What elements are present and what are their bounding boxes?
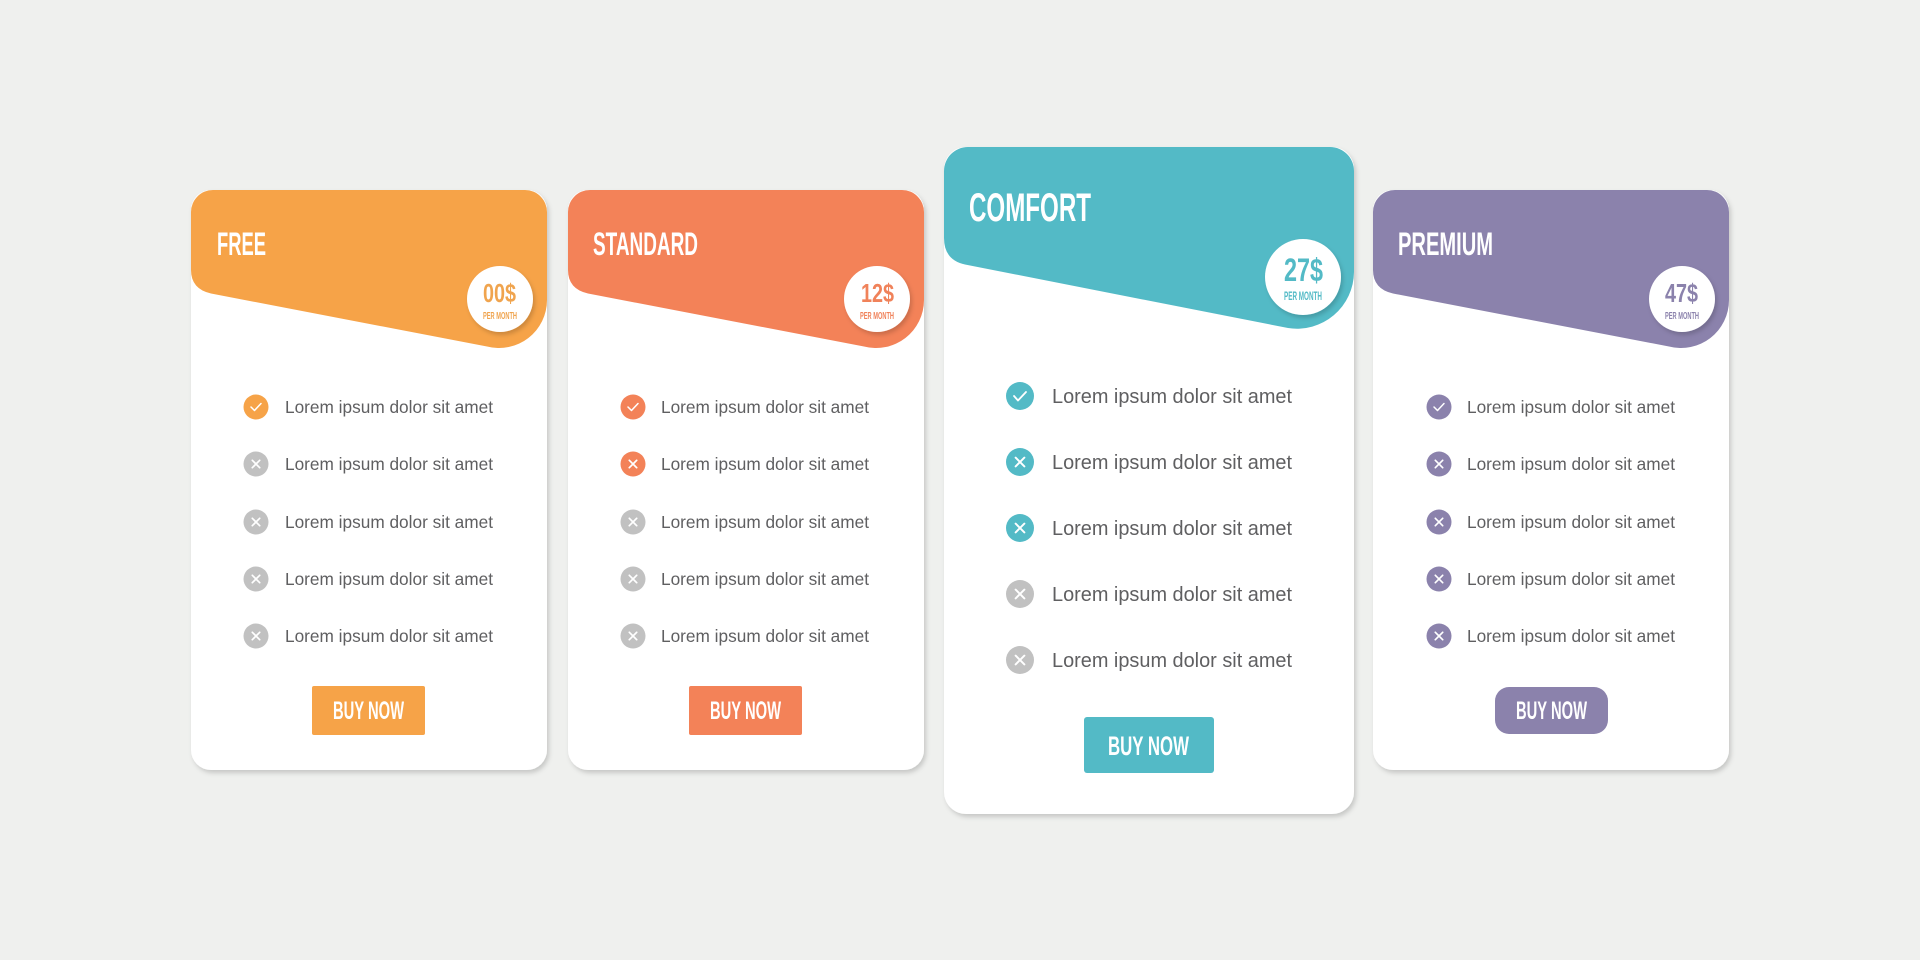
heading: FREE: FREE bbox=[217, 226, 266, 262]
feature list: Lorem ipsum dolor sit amet bbox=[1467, 569, 1675, 589]
feature list: Lorem ipsum dolor sit amet bbox=[661, 397, 869, 417]
button: buy now: BUY NOW bbox=[710, 697, 781, 725]
price badge bbox=[1265, 239, 1341, 315]
card background bbox=[568, 190, 924, 770]
feature list: Lorem ipsum dolor sit amet bbox=[1467, 512, 1675, 532]
header banner bbox=[1373, 190, 1729, 348]
button: buy now bbox=[312, 686, 425, 735]
feature list: Lorem ipsum dolor sit amet bbox=[1052, 386, 1292, 408]
header banner bbox=[568, 190, 924, 348]
heading: STANDARD: STANDARD bbox=[593, 226, 698, 262]
price badge bbox=[1649, 266, 1715, 332]
feature list bbox=[620, 394, 869, 648]
panel: comfort plan bbox=[944, 147, 1354, 814]
button: buy now bbox=[689, 686, 802, 735]
feature list: Lorem ipsum dolor sit amet bbox=[285, 512, 493, 532]
feature list: Lorem ipsum dolor sit amet bbox=[1052, 650, 1292, 672]
button: buy now bbox=[1495, 687, 1608, 734]
feature list: Lorem ipsum dolor sit amet bbox=[285, 626, 493, 646]
heading: PREMIUM: PREMIUM bbox=[1398, 226, 1493, 262]
panel: free plan bbox=[191, 190, 547, 770]
feature list: Lorem ipsum dolor sit amet bbox=[1467, 397, 1675, 417]
price badge: PER MONTH bbox=[483, 311, 517, 322]
button: buy now: BUY NOW bbox=[1108, 731, 1189, 761]
heading: COMFORT: COMFORT bbox=[969, 186, 1091, 230]
header banner bbox=[191, 190, 547, 348]
feature list: Lorem ipsum dolor sit amet bbox=[285, 454, 493, 474]
price badge: 00$ bbox=[483, 278, 516, 308]
feature list: Lorem ipsum dolor sit amet bbox=[661, 454, 869, 474]
price badge bbox=[467, 266, 533, 332]
feature list: Lorem ipsum dolor sit amet bbox=[1052, 518, 1292, 540]
card background bbox=[1373, 190, 1729, 770]
feature list: Lorem ipsum dolor sit amet bbox=[1052, 584, 1292, 606]
feature list: Lorem ipsum dolor sit amet bbox=[285, 569, 493, 589]
price badge bbox=[844, 266, 910, 332]
header banner bbox=[944, 147, 1354, 329]
price badge: PER MONTH bbox=[860, 311, 894, 322]
feature list: Lorem ipsum dolor sit amet bbox=[1467, 626, 1675, 646]
price badge: PER MONTH bbox=[1665, 311, 1699, 322]
feature list: Lorem ipsum dolor sit amet bbox=[285, 397, 493, 417]
feature list: Lorem ipsum dolor sit amet bbox=[1052, 452, 1292, 474]
panel: standard plan bbox=[568, 190, 924, 770]
feature list bbox=[1006, 382, 1292, 674]
panel: premium plan bbox=[1373, 190, 1729, 770]
feature list: Lorem ipsum dolor sit amet bbox=[661, 569, 869, 589]
feature list: Lorem ipsum dolor sit amet bbox=[661, 512, 869, 532]
feature list bbox=[244, 394, 493, 648]
price badge: PER MONTH bbox=[1284, 289, 1322, 303]
button: buy now: BUY NOW bbox=[1516, 697, 1587, 725]
card background bbox=[944, 147, 1354, 814]
feature list: Lorem ipsum dolor sit amet bbox=[661, 626, 869, 646]
button: buy now bbox=[1084, 717, 1214, 773]
feature list: Lorem ipsum dolor sit amet bbox=[1467, 454, 1675, 474]
card background bbox=[191, 190, 547, 770]
button: buy now: BUY NOW bbox=[333, 697, 404, 725]
price badge: 27$ bbox=[1284, 252, 1323, 288]
price badge: 47$ bbox=[1665, 278, 1698, 308]
price badge: 12$ bbox=[861, 278, 894, 308]
feature list bbox=[1426, 394, 1675, 648]
